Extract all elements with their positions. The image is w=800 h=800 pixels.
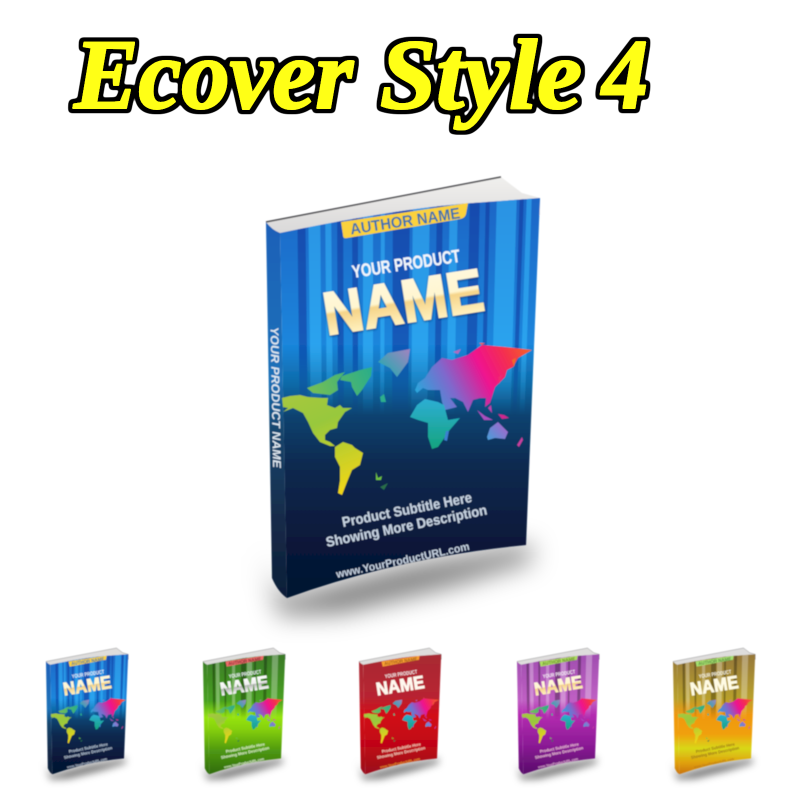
- author text: AUTHOR NAME: [228, 656, 262, 666]
- product label: YOUR PRODUCT: [229, 669, 262, 680]
- author text: AUTHOR NAME: [698, 656, 732, 666]
- front cover: [279, 197, 541, 598]
- url: www.YourProductURL.com: [223, 757, 264, 769]
- title: Ecover Style 4: Ecover: [73, 19, 354, 130]
- url: www.YourProductURL.com: [379, 757, 420, 769]
- subtitle second line: Showing More Description: [221, 745, 270, 760]
- cover: [204, 652, 288, 778]
- product name: NAME: [319, 256, 488, 348]
- shadow: [45, 758, 126, 779]
- subtitle second line: Showing More Description: [377, 745, 426, 760]
- shadow: [358, 758, 439, 779]
- title: Ecover Style 4: 4: [600, 19, 648, 130]
- subtitle: Product Subtitle Here: [539, 741, 580, 754]
- product label: YOUR PRODUCT: [699, 669, 732, 680]
- subtitle second line: Showing More Description: [535, 745, 584, 760]
- book spine: [266, 222, 287, 598]
- book artwork: [46, 648, 131, 778]
- url: www.YourProductURL.com: [66, 757, 107, 769]
- map: [522, 698, 597, 743]
- product label: YOUR PRODUCT: [351, 246, 461, 282]
- book artwork: [517, 648, 602, 778]
- author tab: [382, 656, 420, 667]
- book drop shadow: [262, 545, 532, 614]
- spine title: YOUR PRODUCT NAME: [268, 327, 282, 468]
- url: www.YourProductURL.com: [693, 757, 734, 769]
- subtitle line 1: Product Subtitle Here: [341, 489, 473, 530]
- author tab: [540, 656, 578, 667]
- small book 2: green: [202, 648, 288, 779]
- book top edge: [266, 177, 501, 222]
- product name: NAME: [689, 672, 740, 699]
- cover: [360, 652, 444, 778]
- subtitle: Product Subtitle Here: [68, 741, 109, 754]
- world map: [282, 343, 532, 495]
- author text: AUTHOR NAME: [384, 656, 418, 666]
- subtitle second line: Showing More Description: [691, 745, 740, 760]
- product label: YOUR PRODUCT: [385, 669, 418, 680]
- author text: AUTHOR NAME: [542, 656, 576, 666]
- pages: [46, 648, 128, 667]
- cover: [47, 652, 131, 778]
- pages: [359, 648, 441, 667]
- spine: [46, 662, 52, 774]
- book artwork: [359, 648, 444, 778]
- book artwork: [203, 648, 288, 778]
- product name: NAME: [219, 672, 270, 699]
- title: Ecover Style 4: Style: [380, 19, 582, 130]
- spine: [203, 662, 209, 774]
- author tab: [69, 656, 107, 667]
- spine: [673, 662, 679, 774]
- website url: www.YourProductURL.com: [334, 541, 471, 581]
- author name: AUTHOR NAME: [349, 205, 461, 238]
- product name: NAME: [533, 672, 584, 699]
- author text: AUTHOR NAME: [71, 656, 105, 666]
- cover: [674, 652, 758, 778]
- product name: NAME: [62, 672, 113, 699]
- url: www.YourProductURL.com: [537, 757, 578, 769]
- book pages: [266, 177, 540, 240]
- pages: [673, 648, 755, 667]
- book artwork: [673, 648, 758, 778]
- author tab: [226, 656, 264, 667]
- author tab: [696, 656, 734, 667]
- title: Ecover Style 4: [73, 19, 648, 130]
- shadow: [672, 758, 753, 779]
- spine: [359, 662, 365, 774]
- pages: [203, 648, 285, 667]
- subtitle line 2: Showing More Description: [324, 502, 488, 550]
- spine: [517, 662, 523, 774]
- small book 1: blue: [45, 648, 131, 779]
- map: [364, 698, 439, 743]
- small book 3: red: [358, 648, 444, 779]
- product label: YOUR PRODUCT: [543, 669, 576, 680]
- product label: YOUR PRODUCT: [72, 669, 105, 680]
- subtitle second line: Showing More Description: [64, 745, 113, 760]
- small book 4: purple: [516, 648, 602, 779]
- cover: [518, 652, 602, 778]
- pages: [517, 648, 599, 667]
- shadow: [516, 758, 597, 779]
- subtitle: Product Subtitle Here: [225, 741, 266, 754]
- main book: blue ecover: [266, 177, 550, 610]
- author name tab: [341, 203, 468, 238]
- shadow: [202, 758, 283, 779]
- map: [678, 698, 753, 743]
- product name: NAME: [375, 672, 426, 699]
- map: [51, 698, 126, 743]
- subtitle: Product Subtitle Here: [381, 741, 422, 754]
- small book 5: orange: [672, 648, 758, 779]
- map: [208, 698, 283, 743]
- subtitle: Product Subtitle Here: [695, 741, 736, 754]
